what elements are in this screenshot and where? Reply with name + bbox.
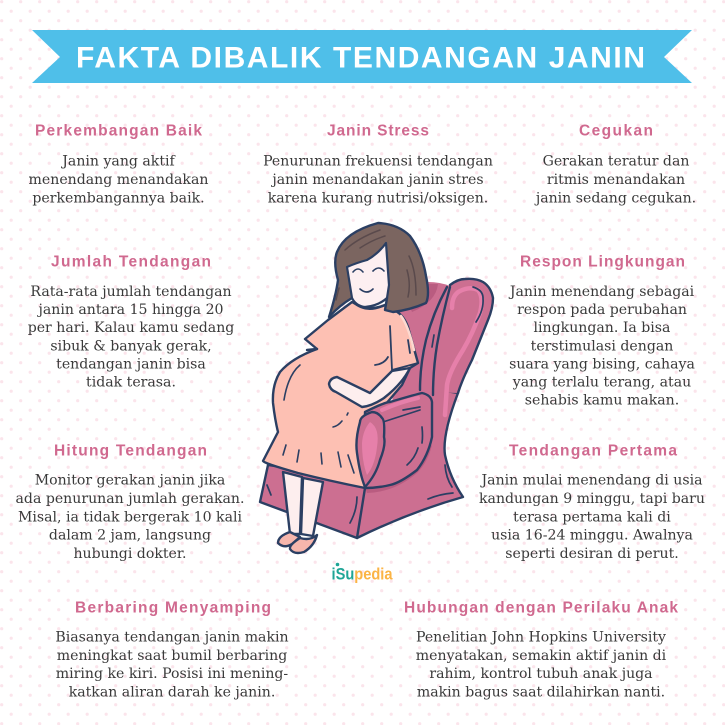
panel: Berbaring Menyamping: Berbaring Menyamping: [75, 600, 271, 616]
icon: armchair base: [260, 387, 463, 538]
panel: Janin Stress: janin menandakan janin stres: [270, 172, 484, 188]
panel: Tendangan Pertama: usia 16-24 minggu. Awalnya: [491, 528, 693, 544]
icon: hair strands: [336, 230, 416, 300]
panel: Respon Lingkungan: Respon Lingkungan: [520, 254, 685, 270]
panel: Perkembangan Baik: menendang menandakan: [29, 172, 208, 188]
panel: Tendangan Pertama: [479, 442, 705, 562]
panel: Tendangan Pertama: Janin mulai menendang di usia: [480, 472, 702, 488]
panel: Respon Lingkungan: terstimulasi dengan: [531, 338, 673, 354]
panel: Respon Lingkungan: respon pada perubahan: [517, 302, 687, 318]
panel: Cegukan: ritmis menandakan: [547, 172, 685, 188]
panel: Berbaring Menyamping: Biasanya tendangan janin makin: [55, 630, 289, 646]
panel: Respon Lingkungan: sehabis kamu makan.: [525, 392, 679, 408]
panel: Janin Stress: [263, 122, 493, 206]
panel: Perkembangan Baik: Janin yang aktif: [60, 154, 177, 170]
panel: Jumlah Tendangan: Rata-rata jumlah tendangan: [30, 284, 232, 300]
icon: armchair back and wing: [392, 278, 493, 415]
panel: Jumlah Tendangan: Jumlah Tendangan: [51, 254, 211, 270]
panel: Cegukan: [534, 122, 696, 206]
panel: Jumlah Tendangan: per hari. Kalau kamu sedang: [28, 320, 234, 336]
title banner: FAKTA DIBALIK TENDANGAN JANIN: [76, 42, 645, 74]
logo: iSupedia: iSupedia: [332, 566, 393, 584]
panel: Hitung Tendangan: Monitor gerakan janin jika: [35, 472, 225, 488]
title banner: [32, 30, 692, 83]
panel: Perkembangan Baik: [29, 122, 208, 206]
panel: Cegukan: Gerakan teratur dan: [543, 154, 689, 170]
panel: Tendangan Pertama: kandungan 9 minggu, tapi baru: [479, 491, 705, 507]
panel: Janin Stress: karena kurang nutrisi/oksigen.: [268, 190, 488, 206]
panel: Tendangan Pertama: Tendangan Pertama: [509, 442, 677, 460]
panel: Janin Stress: Penurunan frekuensi tendangan: [263, 154, 493, 170]
panel: Berbaring Menyamping: katkan aliran darah ke janin.: [69, 684, 275, 700]
panel: Hubungan dengan Perilaku Anak: rahim, kontrol tubuh anak juga: [429, 666, 653, 682]
panel: Hitung Tendangan: [16, 442, 244, 562]
icon: arm: [329, 368, 410, 407]
panel: Hubungan dengan Perilaku Anak: [404, 600, 678, 700]
panel: Hubungan dengan Perilaku Anak: Penelitian John Hopkins University: [416, 630, 666, 646]
panel: Hubungan dengan Perilaku Anak: Hubungan dengan Perilaku Anak: [404, 600, 678, 616]
panel: Jumlah Tendangan: tendangan janin bisa: [56, 356, 206, 372]
icon: hair back: [329, 223, 428, 317]
panel: Hubungan dengan Perilaku Anak: menyatakan, semakin aktif janin di: [416, 648, 667, 664]
panel: Jumlah Tendangan: [28, 254, 234, 390]
panel: Jumlah Tendangan: sibuk & banyak gerak,: [50, 338, 212, 354]
panel: Berbaring Menyamping: [55, 600, 289, 700]
panel: Hubungan dengan Perilaku Anak: makin bagus saat dilahirkan nanti.: [417, 684, 665, 700]
panel: Berbaring Menyamping: miring ke kiri. Posisi ini mening-: [56, 666, 288, 682]
panel: Perkembangan Baik: perkembangannya baik.: [32, 190, 205, 206]
panel: Jumlah Tendangan: janin antara 15 hingga 20: [36, 302, 224, 318]
panel: Berbaring Menyamping: meningkat saat bumil berbaring: [57, 648, 287, 664]
panel: Tendangan Pertama: seperti desiran di perut.: [505, 546, 679, 562]
panel: Respon Lingkungan: Janin menendang sebagai: [508, 284, 695, 300]
icon: dress: [263, 302, 418, 488]
icon: face: [347, 243, 389, 309]
panel: Tendangan Pertama: terasa pertama kali di: [513, 510, 671, 526]
panel: Jumlah Tendangan: tidak terasa.: [86, 374, 176, 390]
panel: Perkembangan Baik: Perkembangan Baik: [35, 122, 202, 140]
icon: legs and shoes: [278, 472, 323, 553]
panel: Hitung Tendangan: hubungi dokter.: [73, 546, 187, 562]
panel: Hitung Tendangan: ada penurunan jumlah gerakan.: [16, 491, 244, 507]
panel: Janin Stress: Janin Stress: [327, 122, 429, 140]
icon: armrest: [356, 393, 432, 538]
panel: Respon Lingkungan: suara yang bising, cahaya: [509, 356, 695, 372]
panel: Respon Lingkungan: [508, 254, 695, 408]
panel: Respon Lingkungan: lingkungan. Ia bisa: [534, 320, 670, 336]
panel: Hitung Tendangan: dalam 2 jam, langsung: [49, 528, 211, 544]
panel: Cegukan: janin sedang cegukan.: [534, 190, 696, 206]
panel: Hitung Tendangan: Hitung Tendangan: [54, 442, 207, 460]
panel: Cegukan: Cegukan: [579, 122, 653, 140]
panel: Hitung Tendangan: Misal, ia tidak bergerak 10 kali: [18, 510, 243, 526]
illustration: pregnant woman in armchair: [260, 223, 493, 553]
panel: Respon Lingkungan: yang terlalu terang, atau: [512, 374, 691, 390]
